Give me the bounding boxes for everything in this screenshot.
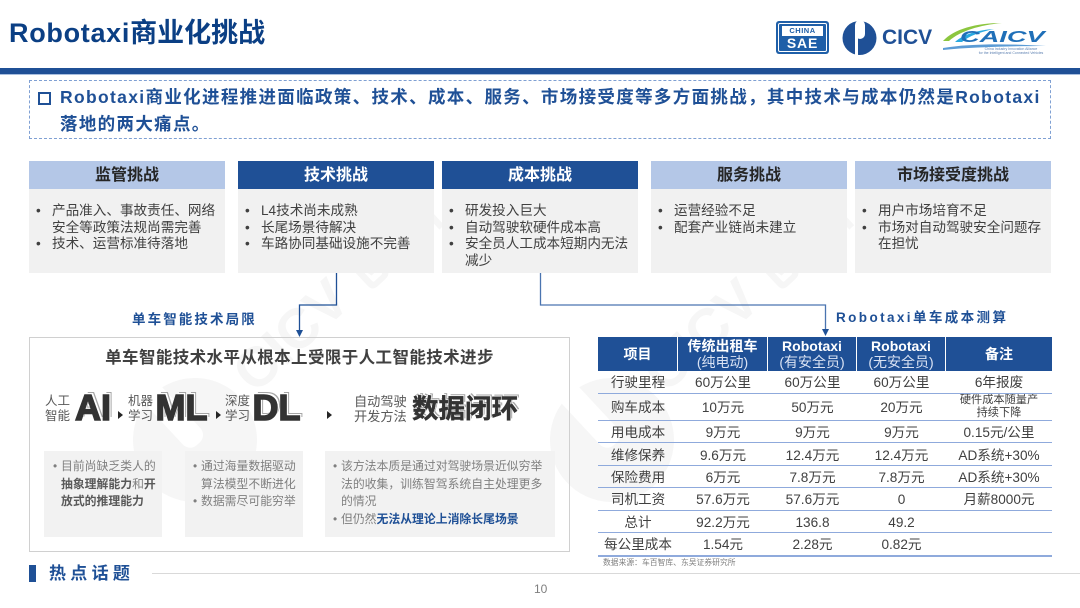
icon: arrow 3 <box>327 411 332 419</box>
table row: 购车成本: 购车成本 <box>611 400 665 415</box>
panel: 市场接受度挑战: 市场接受度挑战 <box>897 167 1009 184</box>
table row: 每公里成本: 2.28元 <box>792 537 833 552</box>
panel: 成本挑战: 自动驾驶软硬件成本高 <box>465 220 601 235</box>
summary text: 落地的两大痛点。 <box>60 114 211 134</box>
table row: 行驶里程: 60万公里 <box>785 375 840 390</box>
summary text <box>60 86 1041 134</box>
table header: 项目 <box>624 346 652 362</box>
panel: 服务挑战: 服务挑战 <box>717 167 781 184</box>
table: cost estimate: (无安全员) <box>868 354 934 370</box>
label: 机器学习: 学习 <box>128 409 153 423</box>
table row: 司机工资: 0 <box>898 492 905 507</box>
table row: 用电成本: 用电成本 <box>611 425 665 440</box>
table: cost estimate <box>598 337 1052 371</box>
metric: 数据闭环: 数据闭环 <box>412 394 518 424</box>
table row: 总计: 总计 <box>624 515 652 530</box>
panel: 技术挑战: 技术挑战 <box>304 167 368 184</box>
panel: 市场接受度挑战 <box>855 161 1051 273</box>
table row: 用电成本: 9万元 <box>706 425 740 440</box>
panel: 技术挑战: 长尾场景待解决 <box>261 220 356 235</box>
table row: 行驶里程: 6年报废 <box>975 375 1023 390</box>
watermark: CICV 创新 <box>630 179 864 404</box>
panel: 市场接受度挑战: 市场对自动驾驶安全问题存在担忧 <box>878 220 1041 251</box>
panel: 监管挑战 <box>29 161 225 273</box>
table row: 司机工资: 司机工资 <box>611 492 665 507</box>
text block: ML limits <box>185 451 303 537</box>
metric: DL: DL <box>252 387 300 428</box>
logo: CAICV <box>943 23 1046 55</box>
label: 深度学习: 学习 <box>225 409 250 423</box>
logo: CICV <box>842 21 932 55</box>
table row: 行驶里程: 行驶里程 <box>611 375 665 390</box>
table: cost estimate: Robotaxi <box>782 338 842 354</box>
table row: 维修保养: AD系统+30% <box>958 448 1040 463</box>
label: 自动驾驶开发方法: 自动驾驶 <box>354 394 407 409</box>
table row: 保险费用: 6万元 <box>706 470 740 485</box>
arrow: tech to single-vehicle panel <box>296 273 338 337</box>
footer: 热点话题: 热点话题 <box>49 564 134 583</box>
table row: 用电成本: 9万元 <box>795 425 830 440</box>
panel: 成本挑战: 研发投入巨大 <box>465 203 547 218</box>
table row: 每公里成本: 1.54元 <box>703 537 743 552</box>
callout: summary <box>29 80 1051 139</box>
panel: 技术挑战: L4技术尚未成熟 <box>261 203 358 218</box>
table: cost estimate: Robotaxi <box>871 338 931 354</box>
heading: Robotaxi单车成本测算: Robotaxi单车成本测算 <box>836 310 1008 325</box>
logo: China SAE <box>776 21 829 54</box>
table row: 用电成本: 0.15元/公里 <box>963 425 1034 440</box>
text block: ML limits: 数据需尽可能穷举 <box>201 494 296 508</box>
table row: 维修保养: 12.4万元 <box>786 448 839 463</box>
table row: 保险费用: 7.8万元 <box>878 470 925 485</box>
logo: CAICV: China Industry Innovation Alliance <box>985 47 1037 51</box>
table row: 司机工资: 月薪8000元 <box>963 492 1035 507</box>
source note: 数据来源：车百智库、东吴证券研究所 <box>603 558 736 567</box>
label: 机器学习: 机器 <box>128 394 153 408</box>
panel: 服务挑战: 运营经验不足 <box>674 203 756 218</box>
label: 人工智能: 智能 <box>45 409 70 423</box>
table row: 购车成本 <box>611 394 1038 419</box>
table row: 维修保养: 12.4万元 <box>875 448 928 463</box>
table row: 用电成本: 9万元 <box>884 425 919 440</box>
table row: 总计: 136.8 <box>795 515 830 530</box>
table: cost estimate: (有安全员) <box>779 354 845 370</box>
panel: 成本挑战 <box>442 161 638 273</box>
heading: 单车智能技术局限: 单车智能技术局限 <box>132 312 257 327</box>
panel: 监管挑战: 技术、运营标准待落地 <box>52 236 188 251</box>
table row: 维修保养 <box>611 448 1040 463</box>
table row: 每公里成本: 0.82元 <box>881 537 922 552</box>
panel: 监管挑战: 产品准入、事故责任、网络安全等政策法规尚需完善 <box>52 203 215 235</box>
text block: data loop limits: 但仍然无法从理论上消除长尾场景 <box>341 512 519 526</box>
panel: single-vehicle intelligence <box>29 337 570 552</box>
icon: square bullet <box>38 92 51 105</box>
panel: 成本挑战: 安全员人工成本短期内无法减少 <box>465 236 628 268</box>
table row: 购车成本: 20万元 <box>880 400 923 415</box>
table row: 购车成本: 持续下降 <box>977 407 1021 419</box>
label: 自动驾驶开发方法 <box>354 394 407 424</box>
table row: 保险费用: AD系统+30% <box>958 470 1040 485</box>
table row: 保险费用: 保险费用 <box>611 470 665 485</box>
icon: arrow 2 <box>216 411 221 419</box>
metric: AI: AI <box>75 387 111 428</box>
table row: 司机工资 <box>611 492 1035 507</box>
title: Robotaxi商业化挑战 <box>9 18 265 48</box>
label: 人工智能 <box>45 394 70 423</box>
table: cost estimate: (纯电动) <box>697 354 748 370</box>
page number: 10 <box>534 582 547 596</box>
panel: 服务挑战 <box>651 161 847 273</box>
table header <box>598 337 677 371</box>
table row: 总计: 92.2万元 <box>696 515 750 530</box>
table row: 每公里成本 <box>604 537 922 552</box>
panel heading: 单车智能技术水平从根本上受限于人工智能技术进步 <box>105 349 494 367</box>
text block: data loop limits: 该方法本质是通过对驾驶场景近似穷举法的收集，训练智驾系统自主处理更多的情况 <box>341 459 542 508</box>
table row: 维修保养: 维修保养 <box>611 448 665 463</box>
watermark: CICV 创新 <box>220 179 454 404</box>
label: 人工智能: 人工 <box>45 394 70 408</box>
panel: 服务挑战: 配套产业链尚未建立 <box>674 220 796 235</box>
table row: 行驶里程: 60万公里 <box>695 375 751 390</box>
logo: CAICV: for the Intelligent and Connected Vehicles <box>979 51 1043 55</box>
logo: China SAE: SAE <box>787 35 818 51</box>
metric: ML: ML <box>156 387 207 428</box>
table row: 购车成本: 硬件成本随量产 <box>960 394 1038 406</box>
arrow: cost to cost table <box>540 273 829 336</box>
label: 深度学习 <box>225 394 250 423</box>
table row: 购车成本: 50万元 <box>791 400 834 415</box>
panel: 技术挑战: 车路协同基础设施不完善 <box>261 236 411 251</box>
logo: CAICV: CAICV <box>960 29 1045 46</box>
header band <box>0 68 1080 75</box>
table row: 保险费用: 7.8万元 <box>789 470 836 485</box>
label: 深度学习: 深度 <box>225 394 250 408</box>
table row: 购车成本: 10万元 <box>702 400 744 415</box>
text block: AI limits <box>44 451 162 537</box>
table row: 每公里成本: 每公里成本 <box>604 537 672 552</box>
table row: 用电成本 <box>611 425 1034 440</box>
label: 机器学习 <box>128 394 153 423</box>
table row: 保险费用 <box>611 470 1040 485</box>
logo: CICV: CICV <box>882 26 932 49</box>
icon: arrow 1 <box>118 411 123 419</box>
table row: 行驶里程: 60万公里 <box>874 375 929 390</box>
panel: 监管挑战: 监管挑战 <box>95 167 159 184</box>
table row: 行驶里程 <box>611 375 1023 390</box>
table row: 总计: 49.2 <box>888 515 915 530</box>
text block: data loop limits <box>325 451 555 537</box>
panel: 成本挑战: 成本挑战 <box>508 167 572 184</box>
table: cost estimate: 备注 <box>985 346 1013 362</box>
table row: 司机工资: 57.6万元 <box>786 492 839 507</box>
summary text: Robotaxi商业化进程推进面临政策、技术、成本、服务、市场接受度等多方面挑战，其中技术与成本仍然是Robotaxi <box>60 86 1041 106</box>
panel: 市场接受度挑战: 用户市场培育不足 <box>878 203 987 218</box>
table row: 总计 <box>624 515 915 530</box>
text block: ML limits: 通过海量数据驱动算法模型不断进化 <box>201 459 296 490</box>
table row: 司机工资: 57.6万元 <box>696 492 750 507</box>
panel: 技术挑战 <box>238 161 434 273</box>
text block: AI limits: 目前尚缺乏类人的 抽象理解能力和开放式的推理能力 <box>61 459 156 508</box>
table row: 维修保养: 9.6万元 <box>700 448 746 463</box>
table: cost estimate: 传统出租车 <box>688 338 758 354</box>
logo: China SAE: CHINA <box>789 26 816 35</box>
label: 自动驾驶开发方法: 开发方法 <box>354 409 407 424</box>
